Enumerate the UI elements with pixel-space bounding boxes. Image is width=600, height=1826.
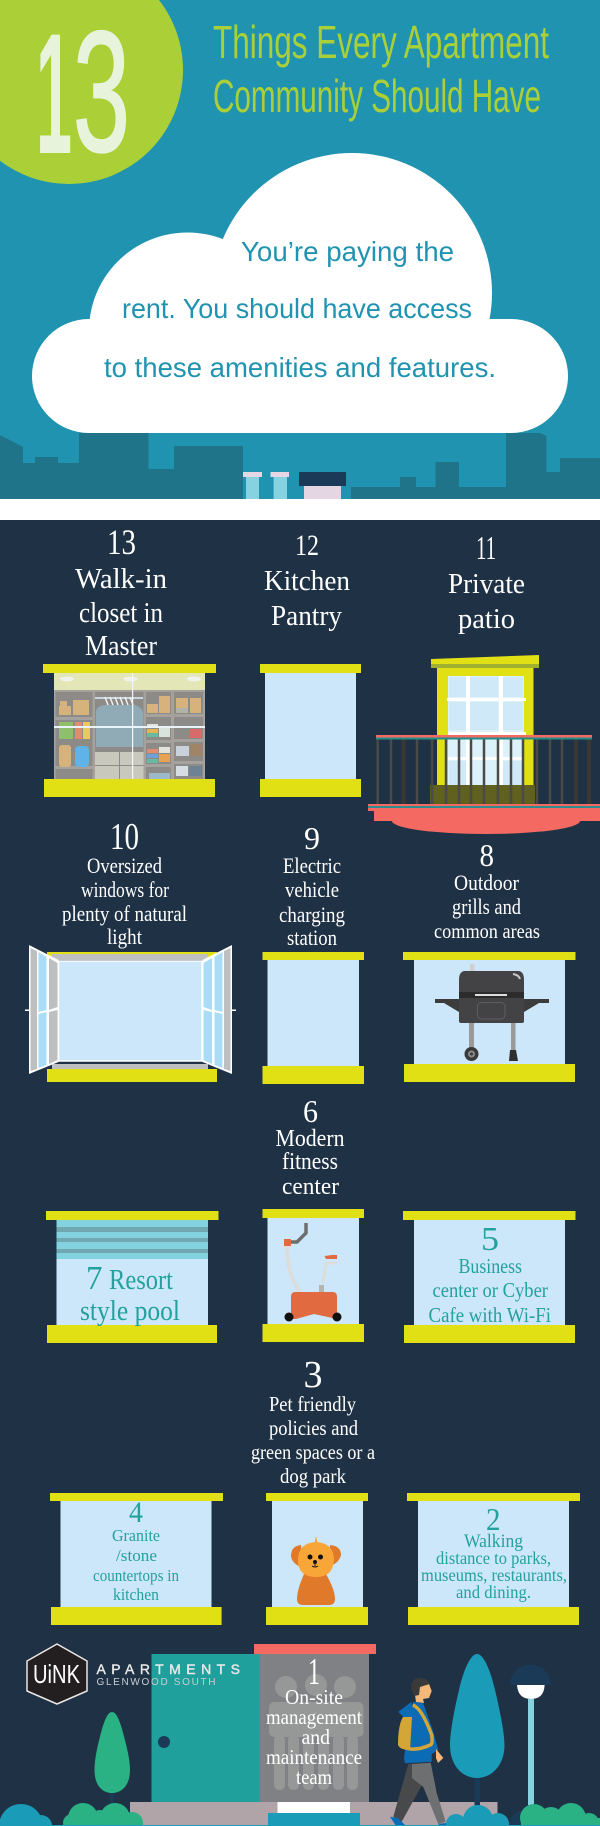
label 1: 1: [308, 1651, 320, 1693]
label 8: [434, 837, 540, 943]
label 5: Cafe with Wi-Fi: [428, 1303, 551, 1327]
item 2: walking distance: [407, 1493, 580, 1625]
teal door: [152, 1654, 260, 1802]
label 10: windows for: [81, 877, 170, 902]
label 10: Oversized: [87, 853, 162, 878]
label 4: countertops in: [93, 1566, 179, 1585]
right shutter: [202, 945, 232, 1074]
label 8: common areas: [434, 919, 540, 943]
label 9: vehicle: [285, 877, 339, 902]
label 9: [279, 820, 345, 950]
city skyline: [0, 433, 600, 499]
label 2: Walking: [464, 1531, 523, 1552]
label 8: 8: [480, 837, 494, 873]
closet illustration: [54, 671, 205, 779]
item 9: EV charging: [262, 820, 364, 1084]
item 3: pet friendly: [251, 1354, 376, 1625]
label 10: [62, 816, 187, 949]
label 4: [93, 1496, 179, 1604]
label 9: station: [287, 925, 337, 950]
ground line: [0, 1825, 600, 1826]
label 9: charging: [279, 902, 345, 927]
label 10: 10: [110, 816, 139, 858]
label 5: [428, 1221, 551, 1327]
label 6: Modern: [276, 1126, 344, 1152]
small green tree: [94, 1712, 130, 1825]
label 6: [276, 1093, 344, 1200]
yellow top bar: [43, 664, 216, 673]
label 6: fitness: [282, 1149, 338, 1175]
logo: APARTMENTS: [96, 1661, 240, 1677]
grill icon: [435, 964, 549, 1061]
label 10: plenty of natural: [62, 901, 187, 926]
grill window: [403, 952, 576, 1082]
pantry window: [260, 664, 361, 797]
item 4: granite countertops: [50, 1493, 223, 1625]
left shutter: [29, 945, 58, 1074]
label 13: Walk-in: [75, 563, 167, 595]
label 1: team: [296, 1765, 332, 1789]
charging window: [262, 952, 364, 1084]
label 1: and: [302, 1725, 330, 1749]
label 13: closet in: [79, 598, 163, 629]
exercise bike icon: [284, 1223, 342, 1322]
green badge circle: [0, 0, 183, 184]
header panel: [0, 0, 600, 520]
item 1: on-site management and building entrance: [130, 1644, 498, 1826]
intro text: You’re paying the: [241, 236, 454, 267]
logo: UiNK: [33, 1659, 81, 1689]
label 1: On-site: [285, 1685, 343, 1709]
fitness window: [262, 1209, 364, 1342]
intro text: [104, 236, 496, 383]
big blue tree: [450, 1654, 504, 1825]
label 2: museums, restaurants,: [421, 1565, 567, 1585]
business window: [403, 1211, 576, 1343]
label 1: [266, 1651, 362, 1789]
label 2: 2: [486, 1501, 500, 1537]
label 4: /stone: [116, 1546, 157, 1565]
granite window: [50, 1493, 223, 1625]
item 12: kitchen pantry: [260, 529, 361, 797]
label 3: green spaces or a: [251, 1440, 376, 1464]
label 13: [75, 522, 167, 662]
label 1: management: [266, 1705, 362, 1729]
item 11: private patio: [368, 530, 600, 834]
label 11: patio: [458, 603, 515, 635]
label 4: kitchen: [113, 1585, 159, 1604]
label 3: policies and: [269, 1416, 358, 1440]
item 10: oversized windows: [25, 816, 236, 1082]
cloud: [32, 153, 568, 433]
label 2: and dining.: [456, 1582, 531, 1602]
label 3: Pet friendly: [269, 1392, 356, 1416]
label 13: Master: [85, 630, 157, 662]
label 1: maintenance: [266, 1745, 362, 1769]
label 4: 4: [129, 1496, 143, 1529]
walking window: [407, 1493, 580, 1625]
label 5: 5: [481, 1221, 499, 1258]
title: [213, 16, 549, 122]
intro text: rent. You should have access: [122, 293, 472, 324]
label 3: dog park: [280, 1464, 346, 1488]
balcony illustration: [368, 655, 600, 834]
label 6: center: [282, 1174, 339, 1200]
right bushes: [446, 1803, 600, 1826]
label 9: 9: [304, 820, 320, 856]
left bushes: [0, 1803, 143, 1826]
item 5: business center: [403, 1211, 576, 1343]
person walking: [390, 1678, 455, 1826]
label 7: style pool: [80, 1296, 180, 1327]
entrance steps: [130, 1802, 498, 1826]
label 4: Granite: [112, 1526, 160, 1545]
label 10: light: [107, 924, 142, 949]
label 7: 7: [86, 1260, 102, 1297]
label 8: grills and: [452, 894, 521, 919]
label 3: [251, 1354, 376, 1488]
item 8: outdoor grills: [403, 837, 576, 1082]
label 9: Electric: [283, 853, 341, 878]
badge number 13: 3: [73, 0, 130, 188]
item 7: resort pool: [46, 1211, 218, 1343]
label 11: Private: [448, 568, 525, 600]
open window illustration: [25, 945, 236, 1082]
item 13: walk-in closet: [43, 522, 216, 797]
label 12: 12: [295, 529, 319, 562]
street lamp: [510, 1664, 551, 1805]
label 2: [421, 1501, 567, 1602]
pet window: [266, 1493, 368, 1625]
label 12: Pantry: [271, 600, 342, 632]
badge number 13: 1: [36, 0, 72, 190]
yellow bottom bar: [44, 779, 215, 797]
label 7: Resort: [109, 1264, 173, 1296]
intro text: to these amenities and features.: [104, 352, 496, 383]
label 7: [80, 1260, 180, 1327]
label 6: 6: [303, 1093, 318, 1129]
label 12: [264, 529, 350, 632]
label 3: 3: [304, 1354, 322, 1396]
pool window: [46, 1211, 218, 1343]
logo: [27, 1644, 240, 1704]
logo: GLENWOOD SOUTH: [96, 1677, 216, 1688]
label 11: 11: [476, 530, 496, 567]
label 13: 13: [107, 522, 136, 562]
team silhouettes: [269, 1674, 364, 1790]
label 8: Outdoor: [454, 870, 520, 895]
rooftop chimneys: [243, 472, 346, 499]
label 5: Business: [458, 1254, 522, 1278]
dog icon: [291, 1536, 341, 1605]
label 2: distance to parks,: [436, 1548, 551, 1568]
item 6: fitness center: [262, 1093, 364, 1342]
label 11: [448, 530, 525, 635]
label 5: center or Cyber: [432, 1278, 548, 1302]
label 12: Kitchen: [264, 565, 350, 597]
grey office panel: [254, 1644, 376, 1802]
